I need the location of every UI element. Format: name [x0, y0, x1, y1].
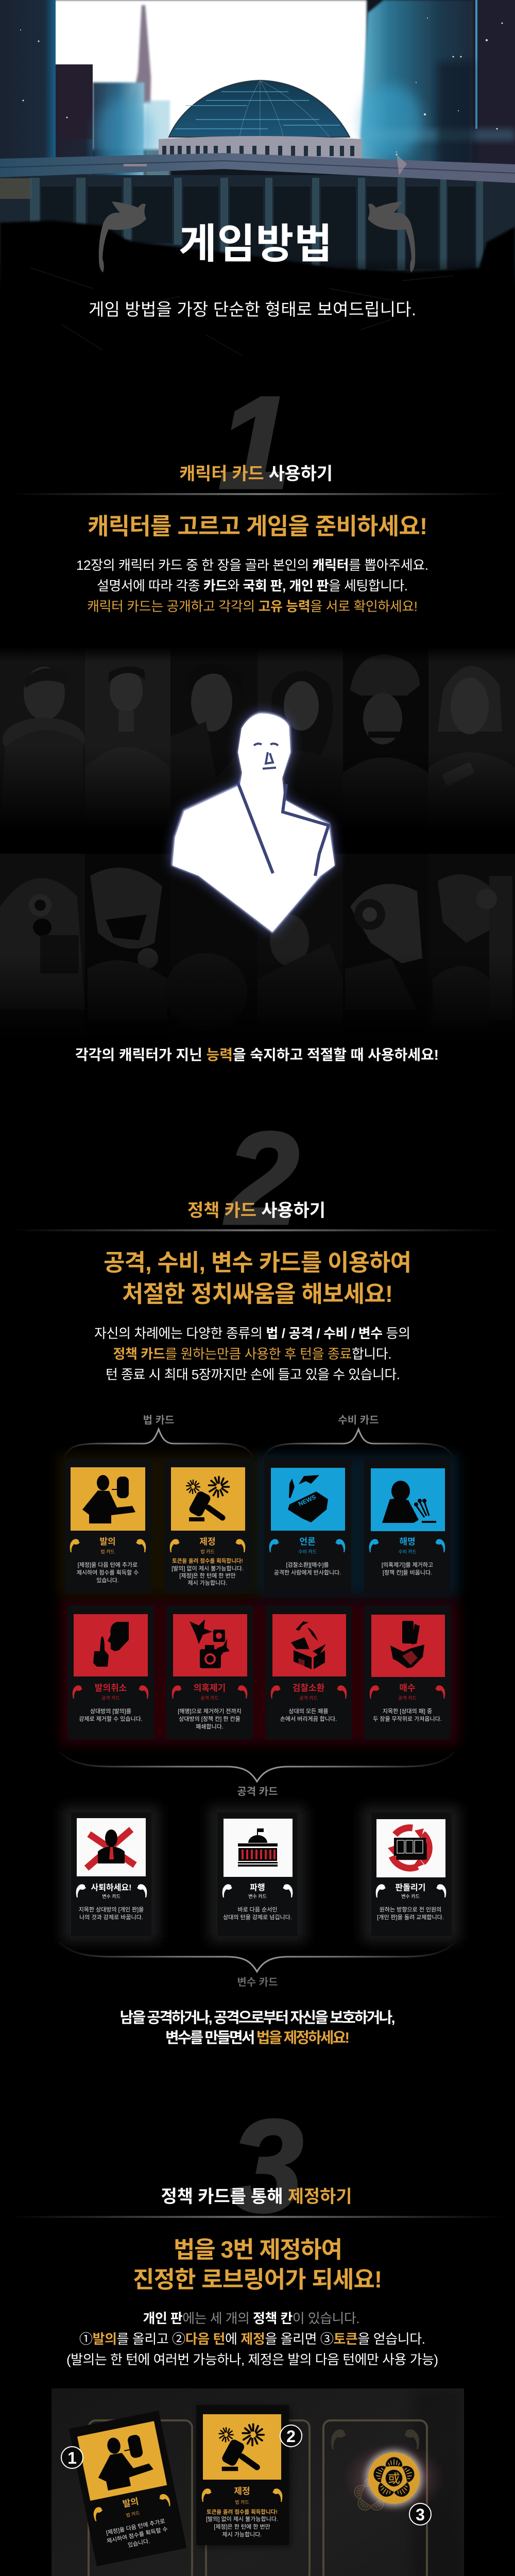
- card: 의혹제기: 의혹제기: [194, 1683, 226, 1693]
- personal board panel: [52, 2388, 464, 2576]
- rotated card: 발의: 법 카드: [126, 2510, 141, 2518]
- icon: speaking man: [91, 2431, 156, 2492]
- card: 검찰소환: 검찰소환: [293, 1683, 325, 1693]
- dome drum: [159, 136, 362, 160]
- left buildings: [0, 0, 170, 229]
- section 1 body text: 12장의 캐릭터 카드 중 한 장을 골라 본인의 캐릭터를 뽑아주세요.: [76, 557, 428, 573]
- row 2 portraits: [0, 854, 515, 1039]
- card: 판돌리기: 원하는 방향으로 전 인원의: [380, 1906, 441, 1913]
- marker 2: 2: [286, 2427, 296, 2446]
- city stars: [20, 18, 503, 156]
- card: 매수: [364, 1605, 451, 1739]
- rotated card: 발의: [제정]을 다음 턴에 추가로: [106, 2518, 166, 2536]
- portrait: headset: [258, 914, 343, 1020]
- portrait: politician: [170, 664, 258, 824]
- building body: [0, 175, 515, 283]
- card: 의혹제기: 공격 카드: [200, 1695, 219, 1701]
- number 2: 2: [224, 1105, 299, 1252]
- card: 매수: 공격 카드: [398, 1695, 417, 1701]
- card: 언론: 공격한 사람에게 반사합니다.: [274, 1569, 341, 1576]
- card: 사퇴하세요!: 나의 것과 강제로 바꿉니다.: [79, 1914, 143, 1921]
- icon: handshake with cards: [390, 1621, 424, 1668]
- marker 2: [280, 2425, 302, 2447]
- icon: assembly hall: [238, 1828, 278, 1867]
- card: 해명: [의혹제기]를 제거하고: [382, 1561, 433, 1568]
- section 2 heading: 정책 카드 사용하기: [187, 1201, 325, 1221]
- card: 매수: 두 장을 무작위로 가져옵니다.: [373, 1716, 442, 1722]
- brace: 변수 카드: [59, 1942, 455, 1972]
- card: 해명: [364, 1459, 450, 1593]
- card: 언론: 언론: [299, 1537, 316, 1547]
- portrait: judge: [428, 666, 515, 824]
- card: 발의취소: 강제로 제거할 수 있습니다.: [79, 1716, 143, 1722]
- card: 의혹제기: [해명]으로 제거하기 전까지: [178, 1707, 242, 1715]
- phoenix left: [99, 201, 146, 273]
- icon: seized box: [291, 1621, 326, 1669]
- token with glow: [342, 2442, 445, 2514]
- tree silhouette: [0, 221, 515, 361]
- policy slot 1: [89, 2420, 192, 2576]
- brace: 법 카드: [64, 1429, 253, 1458]
- card: 발의: [65, 1459, 151, 1593]
- icon: gavel: [219, 2424, 264, 2471]
- icon: cameras: [190, 1619, 230, 1668]
- card: 발의취소: 상대방의 [발의]를: [90, 1708, 131, 1715]
- section 3 heading: 정책 카드를 통해 제정하기: [161, 2187, 352, 2207]
- card: 제정: 법 카드: [235, 2500, 249, 2505]
- icon: speaking man: [82, 1475, 135, 1523]
- section 3 headline: 진정한 로브링어가 되세요!: [133, 2266, 382, 2293]
- section 3 header: [10, 2093, 505, 2240]
- rotated card: 발의: 발의: [122, 2497, 140, 2509]
- card: 제정: [164, 1459, 251, 1593]
- section 2 body text: [94, 1326, 410, 1382]
- rotated card: 발의: 있습니다.: [127, 2538, 150, 2549]
- marker 3: 3: [416, 2505, 425, 2524]
- section 2 conclusion: 남을 공격하거나, 공격으로부터 자신을 보호하거나,: [119, 2009, 396, 2026]
- icon: man at microphones: [382, 1481, 436, 1523]
- right buildings: [360, 0, 515, 232]
- section 1 header: [10, 369, 505, 516]
- section 2 conclusion: [119, 2009, 396, 2046]
- section 2 conclusion: 변수를 만들면서 법을 제정하세요!: [165, 2029, 350, 2046]
- section 1 body text: [76, 557, 428, 614]
- card: 제정: [제정]은 한 턴에 한 번만: [179, 1572, 236, 1579]
- card: 의혹제기: [166, 1605, 253, 1739]
- card: 제정: 제시 가능합니다.: [222, 2531, 262, 2538]
- token with glow: 或: [388, 2472, 400, 2486]
- section 1 headline: 캐릭터를 고르고 게임을 준비하세요!: [88, 513, 427, 539]
- glowing white sky: [54, 0, 367, 149]
- section 2 body text: 턴 종료 시 최대 5장까지만 손에 들고 있을 수 있습니다.: [106, 1367, 400, 1382]
- card: 제정: 제정: [199, 1537, 216, 1547]
- section 3 body text: [66, 2311, 438, 2367]
- card: 발의: 있습니다.: [96, 1577, 119, 1584]
- character portrait grid: [0, 647, 515, 1043]
- section 3 headline: [133, 2236, 382, 2293]
- card glows: [58, 1454, 460, 1942]
- section 2 header: [10, 1105, 505, 1252]
- portrait: planet: [165, 953, 247, 1030]
- section 2 headline: 공격, 수비, 변수 카드를 이용하여: [104, 1249, 411, 1276]
- card: 언론: [검찰소환][매수]를: [286, 1562, 329, 1568]
- card: 사퇴하세요!: [71, 1812, 151, 1936]
- portrait: woman: [258, 671, 343, 824]
- card: 발의취소: 공격 카드: [101, 1695, 120, 1701]
- portrait: monster: [0, 878, 85, 1010]
- card: 제정: [발의] 없이 제시 불가능합니다.: [206, 2516, 278, 2522]
- card: 매수: 매수: [399, 1683, 416, 1693]
- policy slot 3: [323, 2420, 427, 2576]
- card: 발의: 제시하여 점수를 획득할 수: [77, 1569, 139, 1576]
- icon: crossed-out man: [87, 1829, 135, 1868]
- icon: gavel: [186, 1477, 229, 1521]
- number 1: 1: [218, 369, 291, 516]
- card: 사퇴하세요!: 지목한 상대방의 [개인 판]을: [79, 1906, 144, 1913]
- card: 검찰소환: 공격 카드: [299, 1695, 318, 1701]
- card: 검찰소환: 손에서 버리게끔 합니다.: [280, 1716, 337, 1722]
- icon: newspaper: [288, 1475, 328, 1522]
- card: 해명: [정책 칸]을 비웁니다.: [383, 1569, 432, 1576]
- card: 발의: [제정]을 다음 턴에 추가로: [78, 1562, 138, 1568]
- section 2 body text: 자신의 차례에는 다양한 종류의 법 / 공격 / 수비 / 변수 등의: [94, 1326, 410, 1341]
- card: 파행: 변수 카드: [248, 1894, 267, 1899]
- card: 의혹제기: 상대방의 [정책 칸] 한 칸을: [179, 1716, 241, 1722]
- rotated card: 발의: 제시하여 점수를 획득할 수: [106, 2525, 168, 2545]
- section 3 body text: (발의는 한 턴에 여러번 가능하나, 제정은 발의 다음 턴에만 사용 가능): [66, 2352, 438, 2367]
- portrait: pilot: [0, 667, 85, 824]
- icon: newspaper: NEWS: [297, 1493, 317, 1507]
- brace: 공격 카드: [59, 1752, 455, 1782]
- section 1 body text: 설명서에 따라 각종 카드와 국회 판, 개인 판을 세팅합니다.: [97, 578, 408, 594]
- card: 검찰소환: 상대의 모든 패를: [289, 1708, 328, 1715]
- phoenix right: [368, 201, 415, 273]
- label: 법 카드: 법 카드: [143, 1414, 174, 1426]
- section 3 body text: ①발의를 올리고 ②다음 턴에 제정을 올리면 ③토큰을 얻습니다.: [79, 2331, 425, 2347]
- card: 제정: 법 카드: [200, 1549, 215, 1554]
- row 1 portraits: [0, 647, 515, 853]
- card: 언론: [264, 1459, 351, 1593]
- card: 파행: 상대의 턴을 강제로 넘깁니다.: [223, 1914, 292, 1921]
- card: 판돌리기: 변수 카드: [401, 1894, 420, 1899]
- glowing character silhouette: [171, 713, 335, 933]
- dome: [169, 80, 350, 137]
- portrait: officer: [343, 654, 428, 824]
- card: 판돌리기: [371, 1812, 452, 1936]
- row 1 fade: [0, 747, 515, 832]
- card: 발의취소: 발의취소: [95, 1683, 127, 1693]
- section 3 body text: 개인 판에는 세 개의 정책 칸이 있습니다.: [143, 2311, 359, 2326]
- section 1 heading: 캐릭터 카드 사용하기: [179, 464, 333, 484]
- label: 변수 카드: 변수 카드: [237, 1976, 278, 1988]
- icon: shushing face: [93, 1622, 129, 1667]
- brace: 수비 카드: [264, 1429, 453, 1458]
- card: 제정: 제정: [234, 2486, 250, 2496]
- card: 사퇴하세요!: 변수 카드: [102, 1894, 121, 1899]
- card: 제정: 제시 가능합니다.: [188, 1580, 227, 1586]
- character caption: 각각의 캐릭터가 지닌 능력을 숙지하고 적절할 때 사용하세요!: [75, 1047, 439, 1063]
- card: 파행: 파행: [250, 1883, 265, 1892]
- section 3 headline: 법을 3번 제정하여: [174, 2236, 342, 2263]
- section 2 headline: [104, 1249, 411, 1307]
- card: 파행: [217, 1812, 298, 1936]
- card: 검찰소환: [266, 1605, 352, 1739]
- card: 의혹제기: 폐쇄합니다.: [196, 1723, 224, 1730]
- label: 공격 카드: 공격 카드: [237, 1786, 278, 1798]
- subtitle: 게임 방법을 가장 단순한 형태로 보여드립니다.: [89, 300, 416, 319]
- section 2 body text: 정책 카드를 원하는만큼 사용한 후 턴을 종료합니다.: [113, 1346, 391, 1362]
- marker 1: [61, 2447, 83, 2468]
- row 2 fade: [0, 953, 515, 1043]
- rotated card: 발의: [69, 2411, 186, 2566]
- card: 제정: [발의] 없이 제시 불가능합니다.: [171, 1565, 244, 1572]
- portrait: sunglasses: [88, 868, 167, 1020]
- card: 제정: 토큰을 올려 점수를 획득합니다!: [172, 1557, 243, 1564]
- marker 3: [409, 2503, 431, 2525]
- roof band: [0, 153, 515, 183]
- card: 제정: [196, 2405, 291, 2547]
- label: 수비 카드: 수비 카드: [338, 1414, 379, 1426]
- card: 사퇴하세요!: 사퇴하세요!: [91, 1883, 131, 1892]
- section 1 body text: 캐릭터 카드는 공개하고 각각의 고유 능력을 서로 확인하세요!: [87, 599, 418, 614]
- marker 1: 1: [67, 2449, 77, 2467]
- card: 판돌리기: [개인 판]을 돌려 교체합니다.: [377, 1914, 444, 1921]
- card: 해명: 수비 카드: [398, 1549, 417, 1554]
- card: 매수: 지목한 [상대의 패] 중: [383, 1708, 432, 1715]
- card: 해명: 해명: [399, 1537, 416, 1547]
- portrait: priestess: [433, 874, 512, 1030]
- card: 발의: 법 카드: [100, 1549, 115, 1554]
- card: 언론: 수비 카드: [298, 1549, 317, 1554]
- title: 게임방법: [179, 221, 332, 267]
- card: 판돌리기: 판돌리기: [396, 1883, 425, 1892]
- section 2 headline: 처절한 정치싸움을 해보세요!: [122, 1281, 393, 1307]
- icon: rotating boards: [388, 1828, 429, 1870]
- card: 발의취소: [68, 1605, 154, 1739]
- number 3: 3: [230, 2093, 303, 2240]
- scratches: [31, 268, 453, 355]
- portrait: man with open collar: [85, 667, 170, 824]
- card: 파행: 바로 다음 순서인: [238, 1906, 277, 1913]
- hero illustration: national assembly: [0, 0, 515, 363]
- policy slot 2: [206, 2420, 310, 2576]
- card: 발의: 발의: [99, 1537, 116, 1547]
- portrait: android: [345, 884, 422, 1010]
- card: 제정: 토큰을 올려 점수를 획득합니다!: [207, 2509, 278, 2515]
- ghost emblem in slot 3: [353, 2478, 389, 2513]
- card: 제정: [제정]은 한 턴에 한 번만: [214, 2523, 270, 2530]
